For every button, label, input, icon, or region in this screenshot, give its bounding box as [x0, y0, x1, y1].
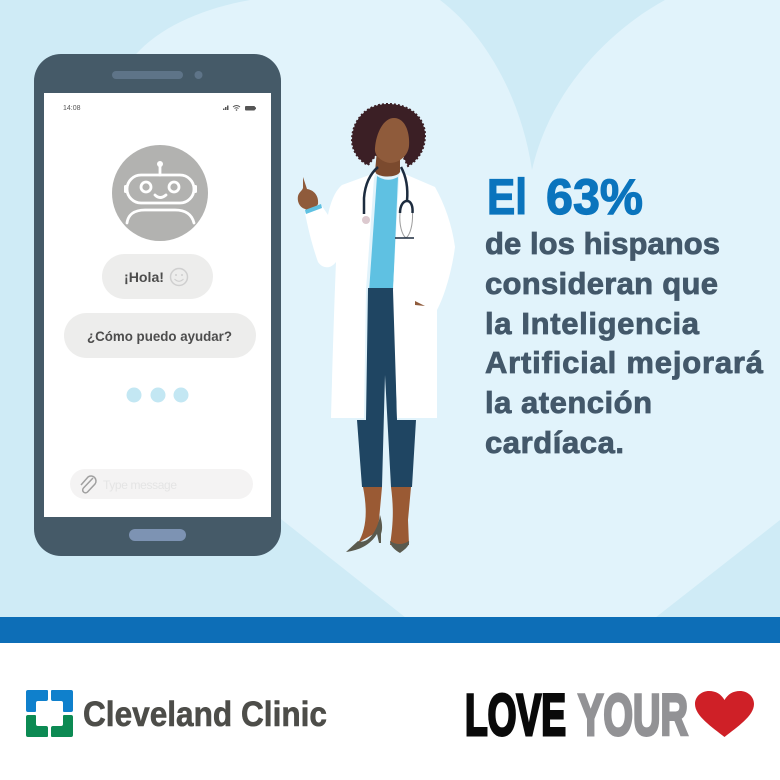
Love Your Heart logo: [465, 683, 754, 748]
home button: [129, 529, 186, 541]
greeting bubble: ¡Hola!: [124, 269, 164, 285]
shirt: [369, 176, 398, 292]
pants: [357, 288, 416, 487]
status bar icons: [223, 106, 256, 111]
status bar time: 14:08: [63, 105, 81, 112]
cuff: [305, 204, 322, 214]
hand pointing: [298, 177, 318, 210]
body text: la atención: [485, 385, 652, 420]
headline: 63%: [546, 169, 643, 225]
love: LOVE: [465, 683, 566, 748]
face: [375, 118, 409, 163]
greeting bubble: [102, 254, 213, 299]
headline: [487, 169, 643, 225]
stethoscope: [362, 167, 414, 238]
body text: consideran que: [485, 266, 718, 301]
question bubble: [64, 313, 256, 358]
body text: cardíaca.: [485, 425, 624, 460]
body text: la Inteligencia: [485, 306, 700, 341]
blue band: [0, 617, 780, 643]
doctor: [298, 104, 455, 553]
neck: [375, 150, 400, 176]
phone speaker: [112, 71, 183, 79]
heart: [695, 691, 754, 737]
your: YOUR: [578, 683, 688, 748]
white footer: [0, 643, 780, 780]
body text: Artificial mejorará: [485, 345, 764, 380]
hair: [352, 104, 425, 166]
shoes: [346, 515, 409, 553]
message input: [70, 469, 253, 499]
logo mark: [26, 690, 73, 737]
Cleveland Clinic logo: [26, 690, 327, 737]
lab coat: [305, 172, 455, 418]
body text: de los hispanos: [485, 226, 720, 261]
headline: El: [487, 169, 527, 225]
phone screen: [44, 93, 271, 517]
phone camera: [194, 71, 202, 79]
typing dots: [126, 388, 188, 402]
robot avatar: [112, 145, 208, 241]
body text: [485, 226, 764, 460]
phone: [34, 54, 281, 556]
question bubble: ¿Cómo puedo ayudar?: [87, 328, 232, 344]
logo wordmark: Cleveland Clinic: [83, 695, 327, 734]
pocket hand: [415, 301, 425, 306]
message input: Type message: [103, 478, 177, 492]
legs: [358, 487, 411, 545]
